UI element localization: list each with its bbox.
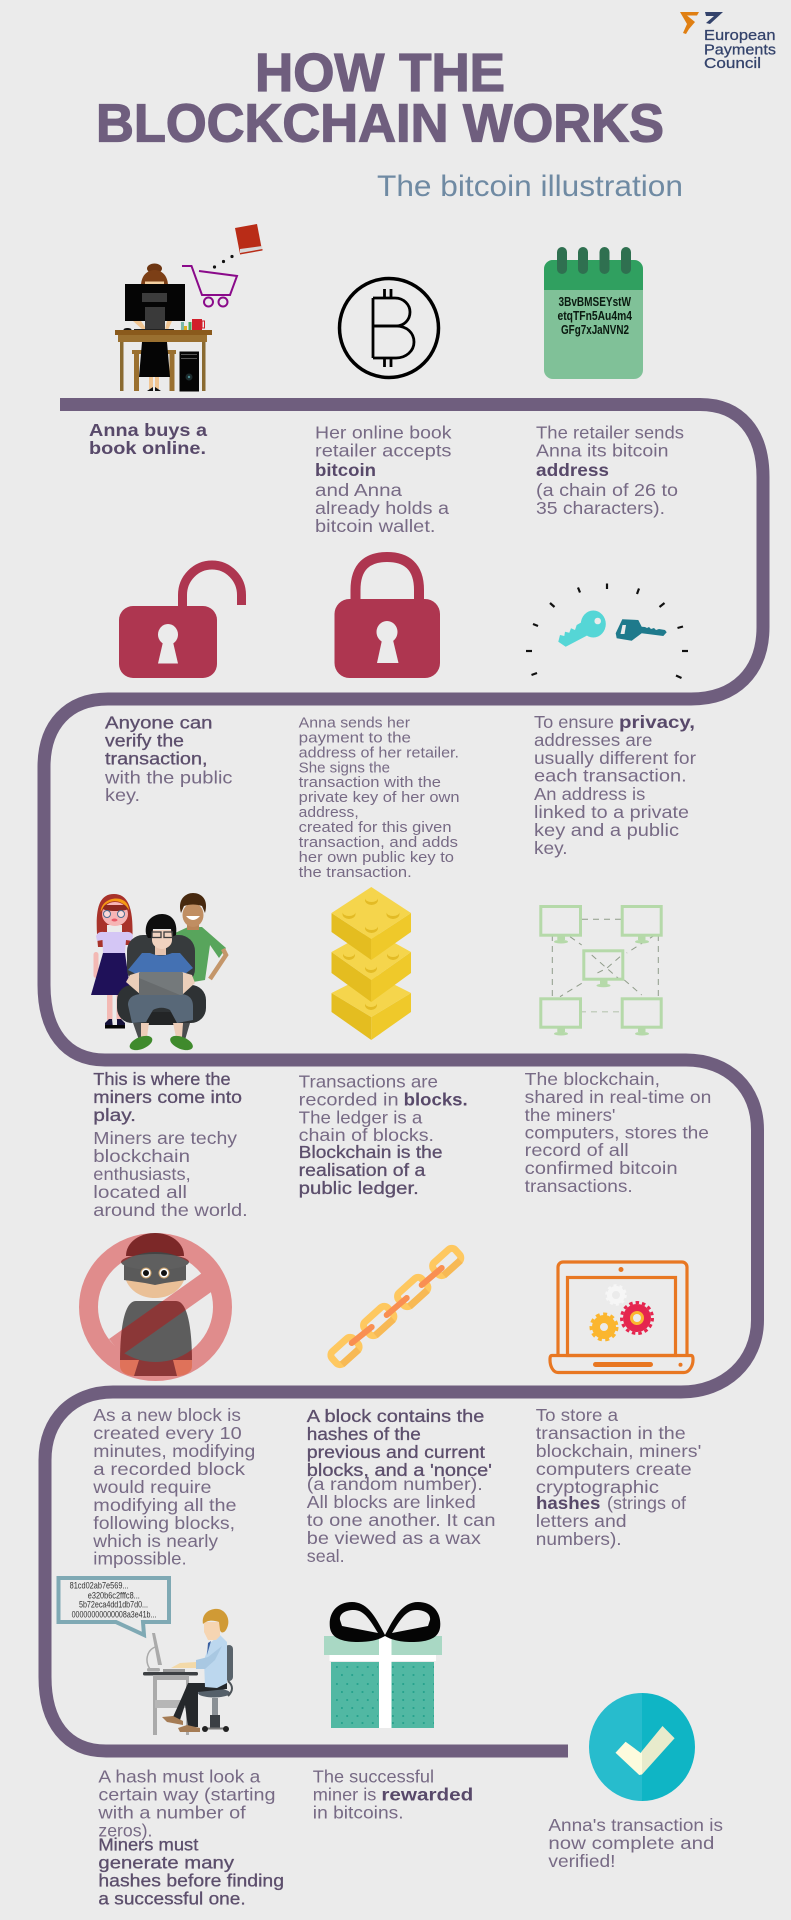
desk and chair bbox=[115, 330, 212, 391]
text: miners create hashes: hashes bbox=[536, 1493, 601, 1513]
text: blockchain shared in real time bbox=[525, 1069, 711, 1196]
logo: European Payments Council: Payments bbox=[704, 42, 776, 58]
icon: public and private keys bbox=[526, 584, 688, 678]
logo: European Payments Council: Council bbox=[704, 56, 761, 72]
text: miners create hashes: numbers). bbox=[536, 1529, 622, 1549]
text: block contains hashes and nonce bbox=[307, 1406, 496, 1566]
text: miners come into play: miners come into bbox=[93, 1087, 242, 1107]
text: Anna sends payment: She signs the bbox=[299, 759, 390, 776]
bottom block bbox=[332, 973, 411, 1040]
monitor bbox=[147, 1633, 162, 1672]
text: blockchain shared in real time: the miners' bbox=[525, 1105, 616, 1125]
polka dots bbox=[336, 1667, 434, 1723]
icon: three miners bbox=[91, 893, 226, 1053]
text: transactions recorded in blocks: recorded in bbox=[299, 1089, 399, 1109]
seated man with laptop bbox=[117, 914, 206, 1053]
text: retailer accepts bitcoin: retailer accepts bbox=[315, 441, 452, 461]
logo: European Payments Council bbox=[680, 12, 776, 72]
icon: hash speech bubble: e320b6c2fffc8... bbox=[88, 1590, 140, 1600]
text: Anna sends payment: her own public key to bbox=[299, 849, 454, 866]
text: Anna buys a book bbox=[89, 420, 207, 458]
shopping cart bbox=[182, 266, 237, 306]
text: a hash must look a certain way bbox=[97, 1767, 284, 1909]
icon: gift box bbox=[324, 1602, 442, 1728]
text: transactions recorded in blocks: realisation of a bbox=[299, 1160, 426, 1180]
text: modifying blocks is impossible bbox=[92, 1405, 255, 1568]
text: anyone can verify: Anyone can bbox=[105, 713, 212, 733]
text: retailer accepts bitcoin: bitcoin bbox=[315, 460, 376, 480]
text: anyone can verify: transaction, bbox=[105, 749, 208, 769]
text: miners come into play: play. bbox=[93, 1105, 136, 1125]
text: transaction complete: verified! bbox=[548, 1851, 616, 1871]
computers bbox=[541, 906, 661, 1027]
text: miners come into play: Miners are techy bbox=[93, 1128, 237, 1148]
private key bbox=[616, 619, 667, 641]
text: miners create hashes: letters and bbox=[536, 1511, 627, 1531]
text: Anna sends payment bbox=[299, 714, 460, 881]
thief figure bbox=[120, 1233, 192, 1376]
standing man right bbox=[175, 893, 226, 982]
icon: prohibited thief bbox=[88, 1233, 222, 1376]
text: a hash must look a certain way: a successful one. bbox=[98, 1889, 246, 1909]
icon: address notepad: GFg7xJaNVN2 bbox=[561, 323, 629, 337]
text: miners come into play: enthusiasts, bbox=[93, 1164, 191, 1184]
text: Anna sends payment: created for this given bbox=[299, 819, 452, 836]
text: a hash must look a certain way: generate many bbox=[98, 1853, 234, 1873]
icon: peer-to-peer network of computers bbox=[541, 906, 661, 1035]
text: transactions recorded in blocks: blocks. bbox=[404, 1089, 468, 1109]
text: retailer accepts bitcoin: and Anna bbox=[315, 480, 402, 500]
text: miners create hashes: To store a bbox=[536, 1405, 618, 1425]
subtitle: The bitcoin illustration bbox=[377, 170, 683, 203]
text: block contains hashes and nonce: be viewed as a wax bbox=[307, 1528, 481, 1548]
icon: miner at computer bbox=[143, 1609, 233, 1735]
box bbox=[324, 1636, 442, 1728]
title: BLOCKCHAIN WORKS bbox=[96, 94, 664, 154]
text: ensure privacy: usually different for bbox=[534, 748, 696, 768]
text: Anna buys a book: book online. bbox=[89, 438, 206, 458]
text: retailer accepts bitcoin: Her online book bbox=[315, 423, 452, 443]
text: ensure privacy: linked to a private bbox=[534, 802, 689, 822]
text: retailer sends address: Anna its bitcoin bbox=[536, 441, 668, 461]
text: ensure privacy: key. bbox=[534, 838, 568, 858]
Anna's dress and legs bbox=[139, 342, 170, 391]
book bbox=[235, 224, 262, 254]
text: Anna sends payment: address of her retailer. bbox=[299, 744, 459, 761]
text: modifying blocks is impossible: would require bbox=[92, 1477, 211, 1497]
text: miners create hashes: cryptographic bbox=[536, 1477, 659, 1497]
icon: hash speech bubble: 5b72eca4dd1db7d0... bbox=[79, 1600, 148, 1610]
text: transaction complete: now complete and bbox=[548, 1833, 714, 1853]
text: modifying blocks is impossible: a recorded block bbox=[93, 1459, 245, 1479]
text: transactions recorded in blocks: chain of blocks. bbox=[299, 1125, 434, 1145]
logo: European Payments Council: European bbox=[704, 28, 776, 44]
text: anyone can verify bbox=[104, 713, 233, 805]
text: transactions recorded in blocks: Blockchain is the bbox=[299, 1142, 442, 1162]
text: transaction complete: Anna's transaction is bbox=[548, 1815, 723, 1835]
icon: hash speech bubble bbox=[58, 1578, 169, 1635]
prohibition sign bbox=[88, 1242, 222, 1372]
icon: address notepad: 3BvBMSEYstW bbox=[558, 295, 631, 309]
text: ensure privacy: each transaction. bbox=[534, 766, 687, 786]
text: retailer accepts bitcoin: bitcoin wallet. bbox=[315, 516, 436, 536]
text: anyone can verify: with the public bbox=[104, 767, 233, 787]
top block bbox=[332, 887, 411, 960]
text: miners come into play: around the world. bbox=[93, 1200, 248, 1220]
text: block contains hashes and nonce: blocks, and a 'nonce' bbox=[307, 1460, 492, 1480]
desk items bbox=[124, 319, 204, 331]
text: block contains hashes and nonce: (a random number). bbox=[307, 1474, 483, 1494]
text: Anna sends payment: Anna sends her bbox=[299, 714, 410, 731]
text: retailer sends address: 35 characters). bbox=[536, 498, 665, 518]
text: block contains hashes and nonce: A block contains the bbox=[307, 1406, 484, 1426]
text: retailer accepts bitcoin: already holds a bbox=[315, 498, 449, 518]
text: miners create hashes: blockchain, miners' bbox=[536, 1441, 701, 1461]
text: ensure privacy: addresses are bbox=[534, 730, 652, 750]
head bbox=[203, 1609, 228, 1640]
text: miners create hashes: (strings of bbox=[607, 1493, 686, 1513]
text: blockchain shared in real time: record of all bbox=[525, 1140, 629, 1160]
text: modifying blocks is impossible: which is nearly bbox=[92, 1531, 218, 1551]
text: miners come into play: This is where the bbox=[93, 1069, 231, 1089]
text: a hash must look a certain way: certain way (starting bbox=[98, 1785, 276, 1805]
dotted trail bbox=[213, 255, 234, 269]
text: block contains hashes and nonce: hashes of the bbox=[307, 1424, 421, 1444]
text: ensure privacy: To ensure bbox=[534, 712, 614, 732]
text: anyone can verify: key. bbox=[105, 785, 140, 805]
text: successful miner rewarded bbox=[313, 1767, 473, 1823]
text: Anna sends payment: private key of her own bbox=[299, 789, 460, 806]
text: blockchain shared in real time: transactions. bbox=[525, 1176, 633, 1196]
text: retailer sends address: The retailer sends bbox=[536, 423, 684, 443]
dashed connections bbox=[552, 919, 658, 1012]
text: Anna buys a book: Anna buys a bbox=[89, 420, 207, 440]
icon: hash speech bubble: 00000000000008a3e41b... bbox=[72, 1610, 156, 1620]
text: Anna sends payment: the transaction. bbox=[299, 864, 412, 881]
icon: closed padlock bbox=[334, 557, 440, 678]
text: miners create hashes: transaction in the bbox=[536, 1423, 686, 1443]
connectors bbox=[352, 1268, 442, 1343]
text: a hash must look a certain way: hashes before finding bbox=[98, 1871, 284, 1891]
icon: hash speech bubble: 81cd02ab7e569... bbox=[70, 1580, 129, 1590]
text: modifying blocks is impossible: created every 10 bbox=[93, 1423, 242, 1443]
radiating ticks bbox=[526, 584, 688, 678]
text: block contains hashes and nonce: All blocks are linked bbox=[307, 1492, 476, 1512]
icon: laptop with gears bbox=[550, 1262, 693, 1372]
text: Anna sends payment: transaction, and adds bbox=[299, 834, 458, 851]
text: retailer accepts bitcoin bbox=[315, 423, 452, 536]
text: miners create hashes: computers create bbox=[536, 1459, 692, 1479]
text: retailer sends address: address bbox=[536, 460, 609, 480]
text: block contains hashes and nonce: previous and current bbox=[307, 1442, 485, 1462]
text: ensure privacy: privacy, bbox=[619, 712, 695, 732]
text: successful miner rewarded: The successful bbox=[313, 1767, 434, 1787]
text: transactions recorded in blocks: public ledger. bbox=[299, 1178, 419, 1198]
text: a hash must look a certain way: zeros). bbox=[98, 1821, 152, 1841]
Anna's hair and head bbox=[141, 264, 168, 286]
icon: bitcoin symbol bbox=[340, 278, 438, 378]
text: modifying blocks is impossible: impossible. bbox=[93, 1548, 187, 1568]
title: HOW THE bbox=[255, 43, 505, 103]
winding timeline path bbox=[44, 404, 763, 1751]
bow bbox=[330, 1602, 440, 1642]
monitor bbox=[125, 284, 185, 331]
text: retailer sends address bbox=[536, 423, 684, 518]
text: miners come into play: located all bbox=[93, 1182, 187, 1202]
text: ensure privacy: An address is bbox=[534, 784, 646, 804]
icon: verified check badge bbox=[589, 1693, 695, 1801]
text: blockchain shared in real time: computers, stores the bbox=[525, 1122, 709, 1142]
links bbox=[329, 1246, 463, 1367]
arms bbox=[133, 321, 172, 330]
text: a hash must look a certain way: A hash must look a bbox=[98, 1767, 261, 1787]
text: miners come into play bbox=[93, 1069, 248, 1220]
text: transactions recorded in blocks: Transactions are bbox=[299, 1071, 438, 1091]
text: blockchain shared in real time: shared in real-time on bbox=[525, 1087, 711, 1107]
legs and shoes bbox=[162, 1683, 227, 1732]
text: successful miner rewarded: in bitcoins. bbox=[313, 1803, 404, 1823]
icon: address notepad bbox=[544, 247, 643, 379]
text: blockchain shared in real time: confirmed bitcoin bbox=[525, 1158, 678, 1178]
text: Anna sends payment: address, bbox=[299, 804, 359, 821]
gears bbox=[591, 1286, 652, 1340]
text: blockchain shared in real time: The blockchain, bbox=[525, 1069, 660, 1089]
torso and arm bbox=[163, 1635, 227, 1688]
text: modifying blocks is impossible: minutes, modifying bbox=[93, 1441, 255, 1461]
text: ensure privacy bbox=[534, 712, 696, 858]
text: transactions recorded in blocks bbox=[299, 1071, 468, 1198]
title bbox=[96, 43, 664, 154]
text: miners come into play: blockchain bbox=[93, 1146, 190, 1166]
icon: open padlock bbox=[119, 565, 242, 678]
text: retailer sends address: (a chain of 26 to bbox=[536, 480, 678, 500]
text: block contains hashes and nonce: seal. bbox=[307, 1546, 345, 1566]
public key bbox=[558, 610, 606, 647]
standing woman left bbox=[91, 894, 136, 1028]
icon: Anna shopping at desk bbox=[115, 224, 262, 392]
icon: address notepad: etqTFn5Au4m4 bbox=[558, 309, 632, 323]
text: transaction complete bbox=[548, 1815, 723, 1871]
text: modifying blocks is impossible: As a new block is bbox=[93, 1405, 241, 1425]
icon: chain links bbox=[329, 1246, 463, 1367]
text: successful miner rewarded: rewarded bbox=[381, 1785, 473, 1805]
text: a hash must look a certain way: with a number of bbox=[97, 1803, 246, 1823]
text: Anna sends payment: payment to the bbox=[299, 729, 411, 746]
text: anyone can verify: verify the bbox=[105, 731, 184, 751]
text: modifying blocks is impossible: following blocks, bbox=[93, 1513, 235, 1533]
text: modifying blocks is impossible: modifying all the bbox=[93, 1495, 237, 1515]
text: ensure privacy: key and a public bbox=[534, 820, 679, 840]
chair bbox=[198, 1645, 233, 1732]
text: successful miner rewarded: miner is bbox=[313, 1785, 377, 1805]
desk bbox=[143, 1672, 198, 1735]
text: a hash must look a certain way: Miners must bbox=[98, 1835, 198, 1855]
middle block bbox=[332, 930, 411, 1002]
text: block contains hashes and nonce: to one another. It can bbox=[307, 1510, 496, 1530]
text: transactions recorded in blocks: The ledger is a bbox=[299, 1107, 423, 1127]
text: Anna sends payment: transaction with the bbox=[299, 774, 441, 791]
text: miners create hashes bbox=[536, 1405, 701, 1549]
computer tower bbox=[180, 352, 199, 392]
icon: stack of lego blocks bbox=[332, 887, 411, 1040]
